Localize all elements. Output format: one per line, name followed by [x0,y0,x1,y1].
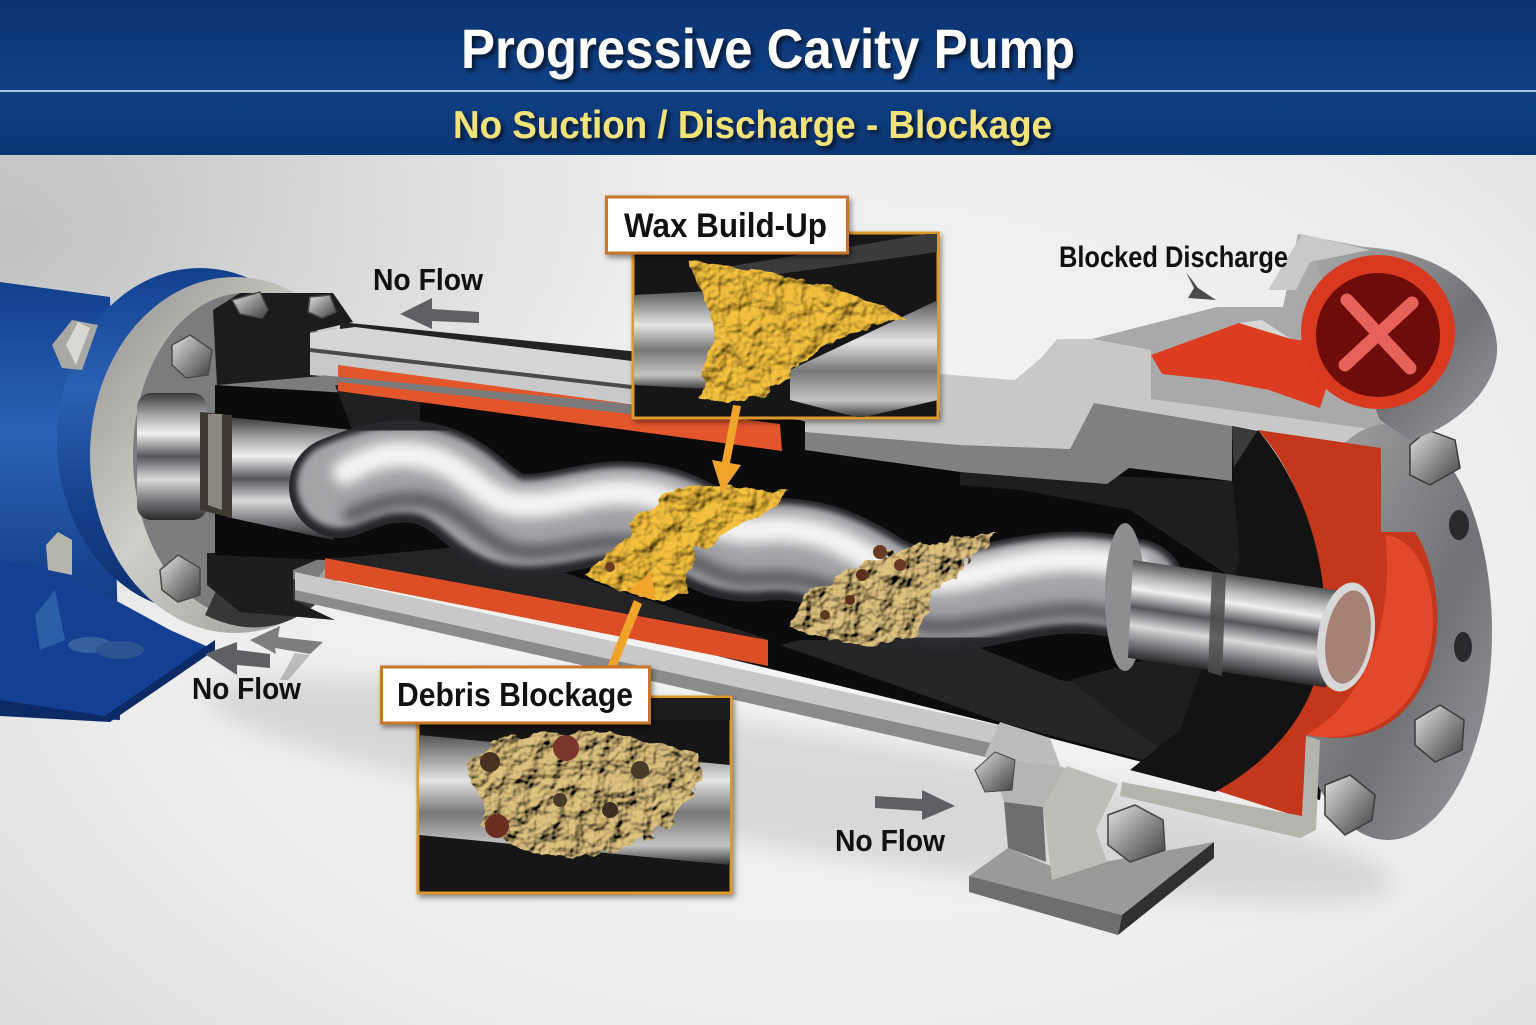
lower housing wall [295,558,1059,766]
shaft cap [1310,578,1382,696]
hub shaft [137,393,353,540]
lower right wall and mounting foot [969,722,1320,935]
red outlet ring [1301,255,1455,409]
arrow: wax to rotor [712,405,741,492]
arrow: debris to rotor [608,572,656,668]
flange bolts [160,292,336,602]
label: no flow left: No Flow [192,671,302,706]
callout: wax build-up [606,197,848,253]
motor and mounting base [0,268,343,722]
black stator lining [325,545,770,640]
red x mark [1345,300,1412,368]
upper housing wall [310,322,782,451]
subtitle: No Suction / Discharge - Blockage [453,104,1052,147]
floor shadow [198,637,1402,943]
callout: debris blockage [382,667,650,723]
bracket [990,758,1118,807]
pointer: blocked discharge [1186,272,1216,300]
label: no flow bottom: No Flow [835,823,946,858]
foot bolts [1108,805,1165,862]
arrow: no flow bottom [875,790,955,820]
red wedge [1151,323,1340,408]
red chamber [1215,430,1437,818]
bolt: motor lower [46,532,72,575]
inset: debris blockage [418,697,731,893]
label: blocked discharge: Blocked Discharge [1059,241,1288,274]
wax clog on rotor [585,487,790,603]
base plate [969,842,1214,915]
bolt: motor upper [52,320,98,370]
red stator liner lower [325,558,768,666]
arrows: no flow left [205,626,323,680]
light cut face [805,339,1400,532]
arrow: no flow top [400,298,479,329]
inset: wax build-up [633,232,938,418]
debris on rotor [605,535,1000,644]
top surface [1092,234,1400,433]
internal chamber [215,385,1340,800]
end flange [1284,424,1492,840]
header banner [0,0,1536,155]
dark wall [805,403,1232,484]
rotor [340,454,1135,626]
red stator liner upper [338,365,782,451]
black end casting [213,293,353,385]
callout: debris blockage: Debris Blockage [397,676,633,713]
shaft end [1105,523,1382,696]
discharge outlet [1151,234,1497,440]
dark casting [780,640,1180,770]
title: Progressive Cavity Pump [461,17,1075,80]
flange bolts right [1325,430,1464,835]
right discharge housing [805,234,1400,532]
flange holes [1449,510,1469,540]
silver flange [90,277,380,633]
callout: wax build-up: Wax Build-Up [624,207,827,245]
label: no flow top: No Flow [373,262,484,297]
